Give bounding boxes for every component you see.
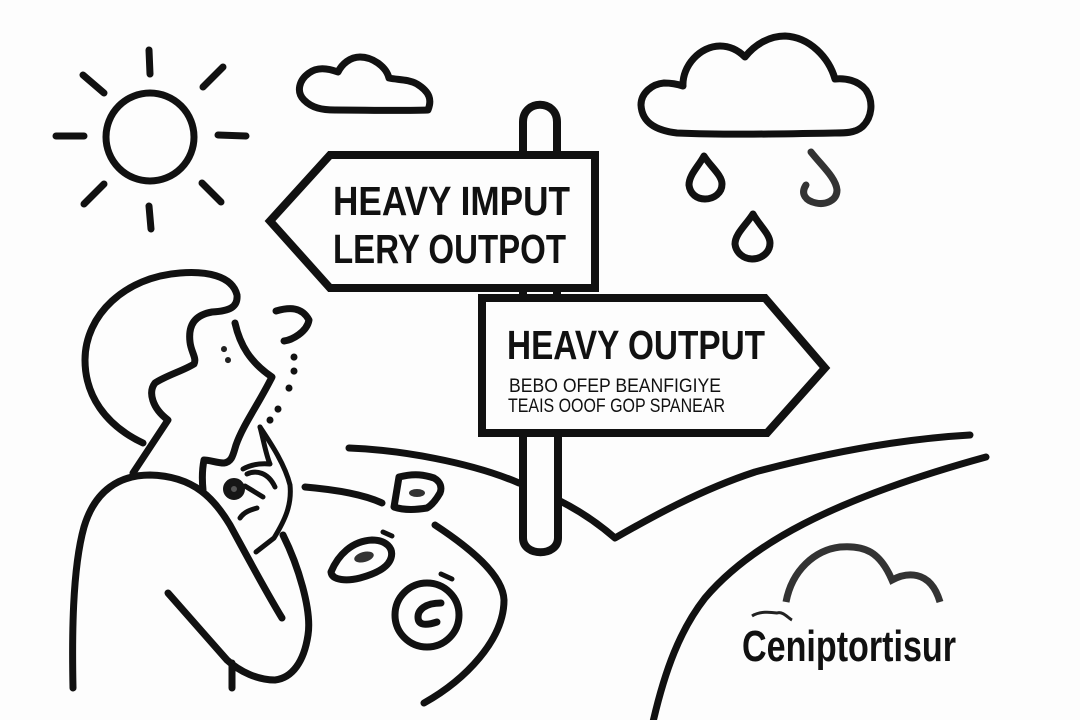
sign: heavy output: TEAIS OOOF GOP SPANEAR bbox=[508, 396, 725, 417]
icon: rain drop hook bbox=[804, 152, 837, 203]
road: left curve bbox=[349, 448, 519, 483]
road: short dash bbox=[305, 487, 382, 503]
sign: heavy output bbox=[482, 298, 825, 433]
logo: cloud bbox=[786, 547, 940, 602]
coin: top bbox=[394, 475, 441, 509]
icon: eye bbox=[224, 349, 228, 360]
icon: small cloud bbox=[299, 57, 430, 110]
logo: wordmark bbox=[742, 612, 956, 671]
icon: sun bbox=[56, 50, 246, 229]
coin: middle bbox=[331, 532, 392, 580]
person: head and face bbox=[85, 273, 272, 490]
road: lower right curve bbox=[653, 457, 986, 720]
icon: rain drop bottom bbox=[735, 214, 770, 259]
sign: heavy input: HEAVY IMPUT bbox=[333, 178, 570, 224]
signpost pole bbox=[523, 105, 558, 552]
sign: heavy output: HEAVY OUTPUT bbox=[507, 322, 765, 368]
icon: rain drop left bbox=[689, 156, 722, 199]
logo: wordmark: Ceniptortisur bbox=[742, 622, 956, 671]
sign: heavy input: LERY OUTPOT bbox=[333, 226, 566, 272]
road: lower left curve bbox=[424, 525, 504, 703]
person: hand and finger bbox=[227, 427, 290, 552]
sign: heavy output: BEBO OFEP BEANFIGIYE bbox=[509, 376, 721, 397]
question mark and dots bbox=[270, 309, 309, 420]
road: upper right curve bbox=[560, 435, 970, 538]
coin: bottom bbox=[395, 574, 459, 647]
icon: rain cloud bbox=[641, 36, 871, 259]
person: body bbox=[73, 475, 309, 688]
sign: heavy input bbox=[270, 155, 595, 288]
